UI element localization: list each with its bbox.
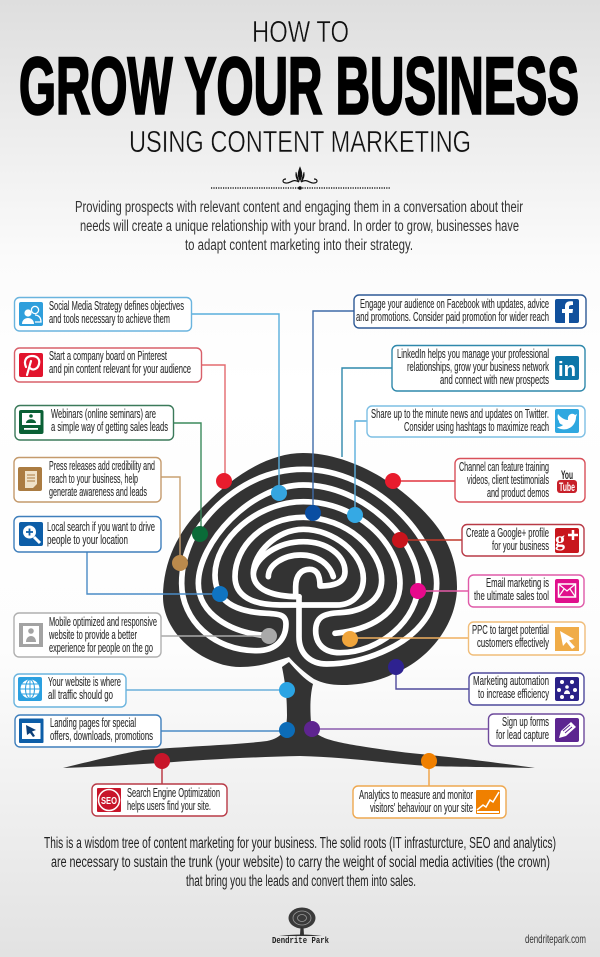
panel: press releases: reach to your business, help	[49, 472, 138, 486]
panel: local search: Local search if you want to drive	[47, 520, 155, 534]
tree	[63, 453, 535, 768]
panel: website	[14, 674, 126, 707]
panel: google plus	[462, 524, 584, 556]
icon: seo badge: SEO	[101, 796, 117, 807]
panel: pinterest: and pin content relevant for your audience	[49, 362, 191, 376]
panel: email: Email marketing is	[486, 576, 549, 590]
panel: email: the ultimate sales tool	[474, 589, 549, 603]
panel: website: all traffic should go	[48, 688, 113, 702]
connector: local search	[87, 552, 228, 602]
connector: pinterest	[202, 365, 232, 489]
panel: local search: people to your location	[47, 533, 128, 547]
panel: mobile: experience for people on the go	[49, 641, 153, 655]
panel: mobile	[14, 613, 161, 657]
panel: google plus: for your business	[492, 539, 549, 553]
icon: linkedin	[555, 356, 579, 381]
panel: pinterest: Start a company board on Pinterest	[49, 349, 167, 363]
panel: mobile: website to provide a better	[48, 628, 137, 642]
icon: youtube: You	[561, 468, 573, 482]
tree roots and trunk	[63, 662, 535, 768]
connector: youtube	[385, 473, 455, 489]
connector: social media strategy	[192, 314, 287, 501]
connector: linkedin	[342, 368, 392, 457]
panel: sign up forms	[488, 714, 584, 746]
panel: linkedin	[392, 346, 585, 391]
icon: facebook	[555, 299, 579, 323]
icon: pencil	[555, 718, 579, 742]
icon: globe	[18, 677, 42, 701]
icon: document	[18, 467, 42, 491]
panel: sign up forms: Sign up forms	[502, 715, 549, 729]
connector: webinars	[174, 423, 208, 542]
title: HOW TO	[252, 14, 349, 49]
tree crown labyrinth	[163, 453, 457, 685]
panel: automation: Marketing automation	[473, 674, 549, 688]
connector: email	[410, 583, 468, 599]
panel: mobile: Mobile optimized and responsive	[49, 615, 157, 629]
panel: analytics: visitors' behaviour on your site	[370, 801, 473, 815]
panel: sign up forms: for lead capture	[496, 728, 549, 742]
panel: ppc	[468, 622, 585, 655]
connector: facebook	[305, 311, 354, 521]
logo: dendrite park	[272, 908, 329, 946]
panel: seo: helps users find your site.	[127, 799, 211, 813]
panel: seo: Search Engine Optimization	[127, 786, 220, 800]
icon: youtube	[557, 468, 577, 494]
panel: twitter	[367, 406, 585, 437]
panel: local search	[14, 516, 161, 552]
panel: email	[468, 575, 584, 607]
panel: press releases: Press releases add credibility and	[49, 459, 155, 473]
icon: linkedin: in	[558, 359, 576, 381]
icon: tablet	[19, 623, 43, 647]
panel: website: Your website is where	[48, 675, 121, 689]
panel: ppc: PPC to target potential	[472, 623, 549, 637]
icon: envelope	[555, 579, 579, 603]
connector: press releases	[161, 477, 188, 571]
panel: analytics: Analytics to measure and monitor	[359, 788, 473, 802]
icon: google plus: g	[555, 529, 565, 551]
closing text	[44, 835, 556, 890]
panel: facebook	[354, 295, 586, 328]
connector: google plus	[392, 532, 462, 548]
connector: twitter	[347, 421, 367, 523]
panel: landing pages	[15, 715, 161, 747]
panel: press releases	[14, 458, 161, 502]
panel: webinars: Webinars (online seminars) are	[51, 407, 156, 421]
panel: webinars: a simple way of getting sales leads	[51, 420, 168, 434]
panel: automation: to increase efficiency	[478, 687, 549, 701]
connector: seo	[154, 753, 170, 784]
connector: automation	[388, 659, 469, 689]
closing text: that bring you the leads and convert them into sales.	[186, 873, 416, 890]
panel: landing pages: Landing pages for special	[50, 716, 136, 730]
panel: seo	[92, 784, 227, 816]
icon: magnifier	[19, 522, 43, 546]
panel: youtube	[455, 458, 585, 502]
connector: analytics	[421, 753, 437, 786]
icon: twitter bird	[555, 409, 579, 433]
title	[19, 14, 579, 159]
intro text	[75, 199, 523, 254]
panel: webinars	[15, 406, 174, 440]
icon: youtube: Tube	[559, 480, 575, 494]
icon: webinar screen	[19, 410, 44, 434]
icon: line chart	[476, 790, 500, 814]
connector: landing pages	[161, 722, 295, 738]
panel: press releases: generate awareness and leads	[49, 485, 147, 499]
icon: people	[19, 302, 43, 326]
logo: dendrite park: Dendrite Park	[272, 936, 329, 946]
icon: cursor on page	[19, 718, 44, 743]
intro text: to adapt content marketing into their strategy.	[185, 237, 413, 254]
panel: pinterest	[14, 348, 202, 382]
icon: network	[555, 677, 579, 701]
icon: pinterest	[19, 353, 43, 377]
connector: sign up forms	[304, 721, 488, 737]
icon: pointer	[555, 627, 579, 651]
panel: ppc: customers effectively	[477, 636, 549, 650]
title: USING CONTENT MARKETING	[129, 124, 471, 159]
ornament divider	[211, 167, 390, 190]
panel: social media strategy	[14, 298, 192, 331]
panel: youtube: and product demos	[487, 486, 549, 500]
panel: automation	[469, 673, 584, 705]
panel: social media strategy: and tools necessary to achieve them	[49, 312, 170, 326]
connector: mobile	[161, 628, 277, 644]
panel: google plus: Create a Google+ profile	[466, 526, 549, 540]
panel: analytics	[353, 786, 506, 818]
panel: landing pages: offers, downloads, promotions	[50, 729, 153, 743]
connector: ppc	[342, 631, 468, 647]
panel: social media strategy: Social Media Strategy defines objectives	[49, 299, 184, 313]
connector: website	[126, 682, 295, 698]
